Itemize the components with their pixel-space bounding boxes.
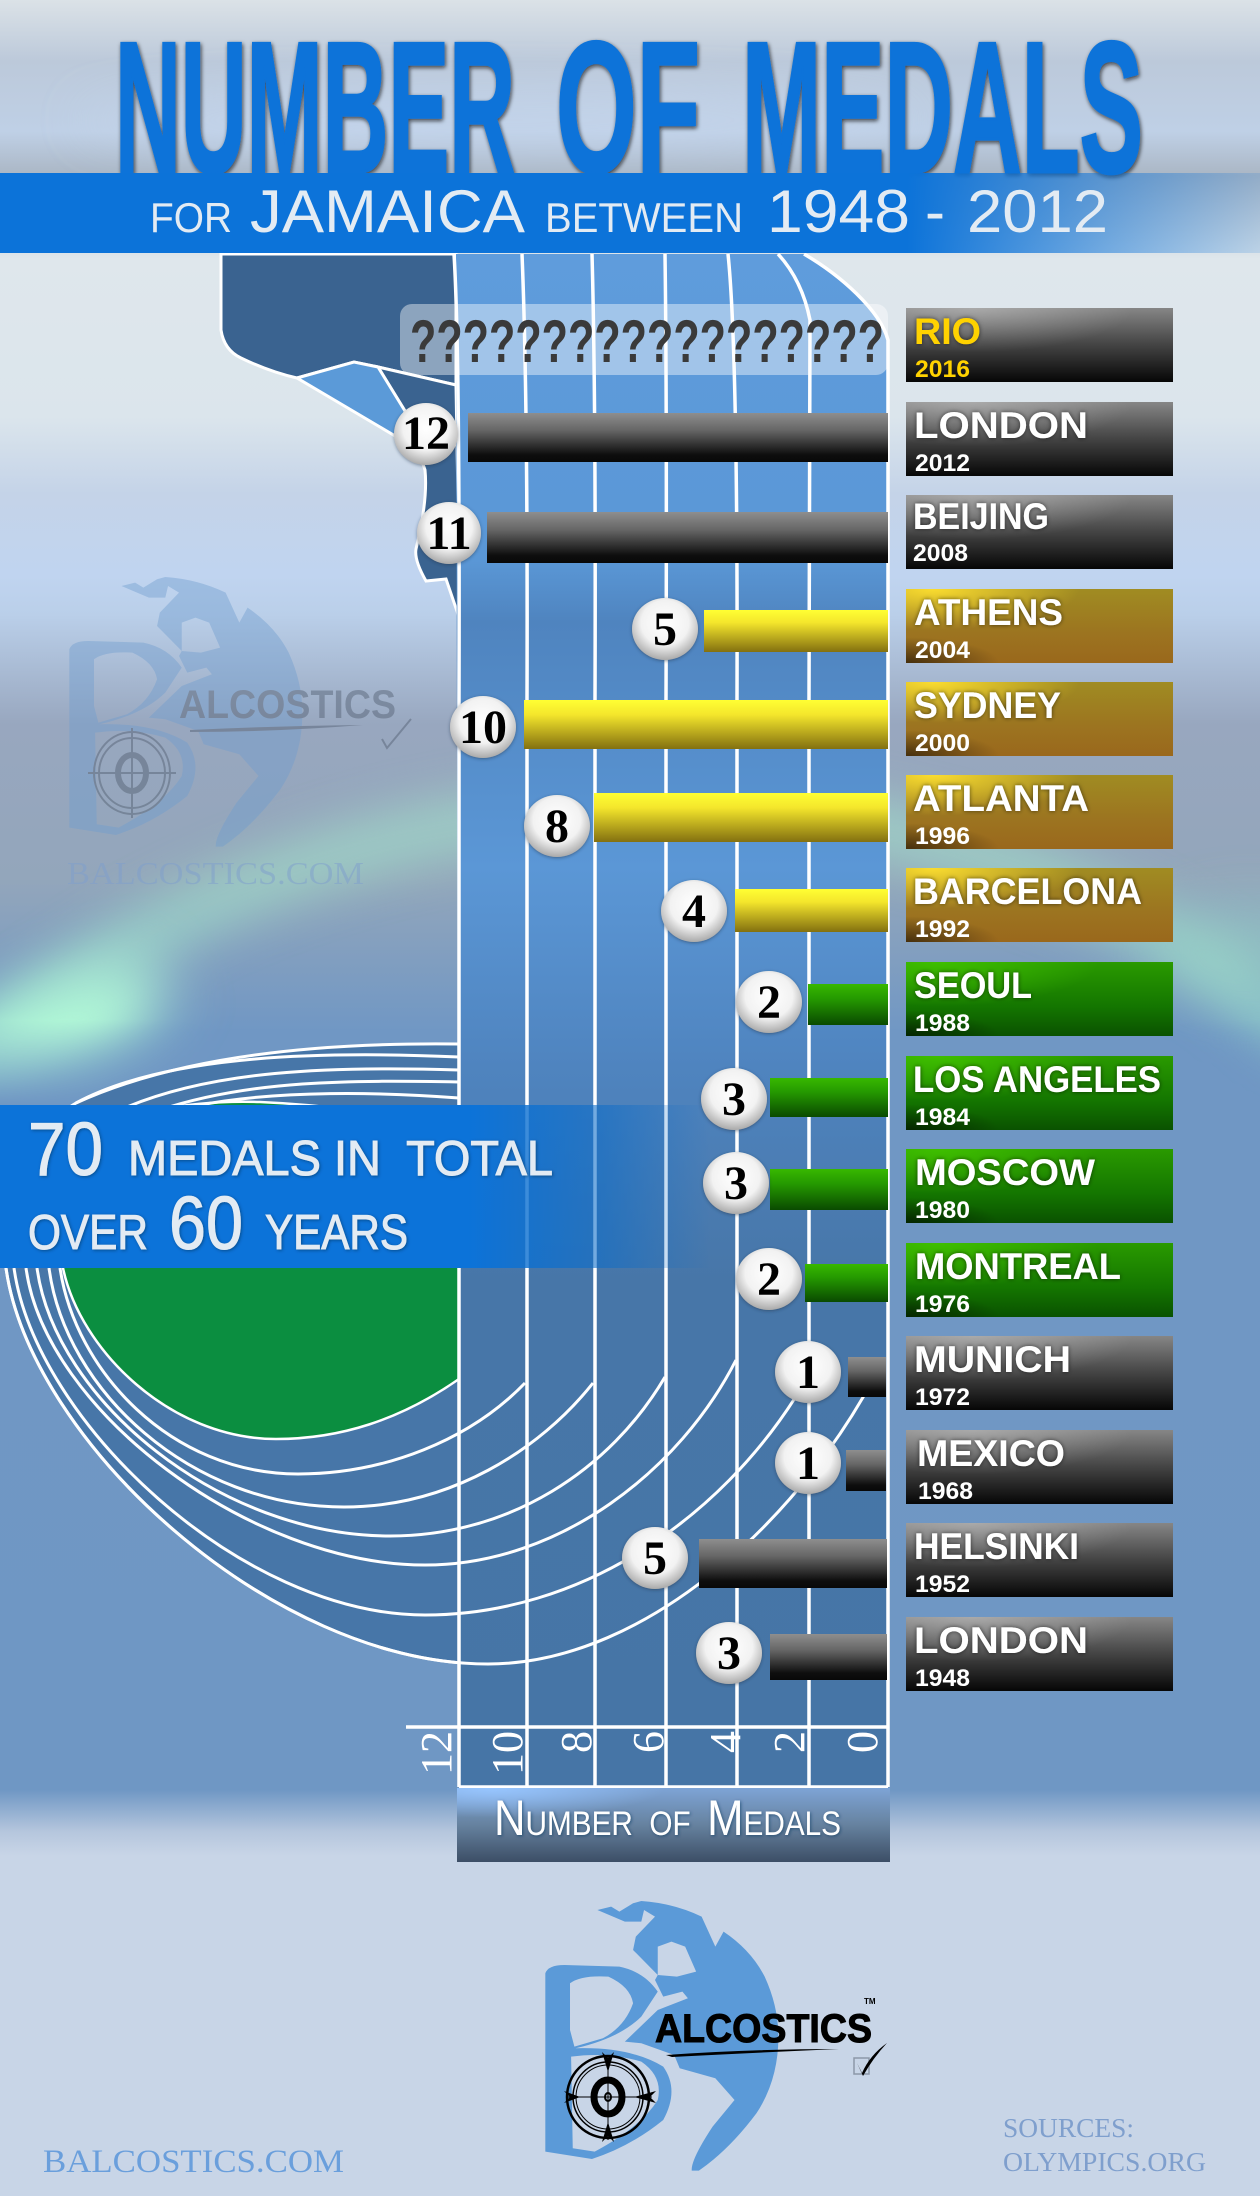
watermark logo: ALCOSTICS [179,683,396,727]
subtitle banner [0,173,1260,253]
bar: montreal 1976 [805,1264,888,1302]
y axis tick labels: 2 [765,1731,814,1753]
bar: barcelona 1992 [735,889,888,932]
ball 3 london [696,1622,762,1684]
bars [468,413,888,1680]
rio question marks: ?????????????????? [410,308,884,375]
bar: london 1948 [770,1634,887,1680]
total callout banner: MEDALS IN TOTAL [128,1132,553,1186]
subtitle banner: 2012 [967,178,1108,245]
ball 11 [417,502,481,564]
bar: seoul 1988 [808,984,888,1025]
swoosh [666,2049,839,2057]
ball 1 mexico [775,1432,841,1494]
label: rio 2016: 2016 [915,356,970,383]
bar: london 2012 [468,413,888,462]
sources [1003,2113,1206,2177]
ball 8 [524,795,590,857]
label: mexico 1968 [906,1430,1173,1505]
y axis tick labels: 10 [483,1731,532,1775]
label: helsinki 1952 [906,1523,1173,1598]
subtitle banner: - [925,178,945,245]
bar: beijing 2008 [487,512,888,563]
label: athens 2004: ATHENS [914,592,1063,633]
label: sydney 2000: 2000 [915,730,970,757]
y axis tick labels: 4 [701,1731,750,1753]
total callout banner: YEARS [265,1206,408,1260]
label: rio 2016: RIO [914,311,981,352]
subtitle banner: FOR [150,194,232,241]
label: beijing 2008 [906,495,1173,569]
bar: sydney 2000 [524,700,888,749]
label: helsinki 1952: 1952 [915,1571,970,1598]
label: helsinki 1952: HELSINKI [914,1526,1079,1567]
title: NUMBER [115,3,515,212]
y axis tick labels [412,1731,887,1775]
bar: los angeles 1984 [770,1078,888,1117]
label: mexico 1968: MEXICO [917,1433,1065,1474]
value balls [394,403,841,1684]
games labels [906,308,1173,1692]
total callout banner: OVER [28,1206,148,1260]
label: london 2012: LONDON [914,405,1088,446]
label: seoul 1988 [906,962,1173,1037]
ball 1 munich [775,1341,841,1403]
label: atlanta 1996: ATLANTA [913,778,1089,819]
ball 3 los angeles [701,1068,767,1130]
ball 2 seoul: 2 [757,976,781,1029]
bar: munich 1972 [848,1357,886,1397]
stadium track [5,254,888,1787]
website: BALCOSTICS.COM [43,2144,344,2180]
label: barcelona 1992: BARCELONA [913,871,1142,912]
label: seoul 1988: SEOUL [914,965,1032,1006]
label: barcelona 1992 [906,868,1173,943]
bar: mexico 1968 [846,1450,886,1491]
trademark: TM [864,1997,876,2006]
y axis tick labels: 8 [552,1731,601,1753]
brand name: ALCOSTICS [655,2007,872,2051]
title: OF [556,3,700,212]
ball 5 athens: 5 [653,603,677,656]
label: london 2012: 2012 [915,450,970,477]
label: london 2012 [906,402,1173,477]
dark infield top [221,254,456,385]
rio question marks [400,304,888,375]
ball 8: 8 [545,800,569,853]
ball 1 mexico: 1 [796,1437,820,1490]
infield grass [63,1102,459,1439]
oval lower track [5,1044,888,1664]
label: london 1948: LONDON [914,1620,1088,1661]
label: munich 1972: 1972 [915,1384,970,1411]
balcostics logo [545,1901,887,2171]
sources: OLYMPICS.ORG [1003,2147,1206,2177]
label: munich 1972: MUNICH [914,1339,1071,1380]
bar: helsinki 1952 [699,1539,887,1588]
ball 12 [394,403,458,465]
label: sydney 2000 [906,682,1173,757]
label: montreal 1976 [906,1243,1173,1318]
bar: moscow 1980 [770,1169,888,1210]
label: montreal 1976: 1976 [915,1291,970,1318]
label: athens 2004: 2004 [915,637,971,664]
total callout banner: 60 [169,1181,243,1265]
ball 12: 12 [402,407,450,460]
label: sydney 2000: SYDNEY [914,685,1061,726]
label: beijing 2008: BEIJING [913,496,1049,537]
subtitle banner: 1948 [767,178,910,245]
y axis tick labels: 6 [624,1731,673,1753]
label: barcelona 1992: 1992 [915,916,970,943]
main straight [456,254,888,1787]
ball 2 montreal [736,1248,802,1310]
label: atlanta 1996: 1996 [915,823,970,850]
sources: SOURCES: [1003,2113,1134,2143]
total callout banner: 70 [28,1107,103,1191]
label: athens 2004 [906,589,1173,664]
bar: atlanta 1996 [594,793,888,842]
label: montreal 1976: MONTREAL [915,1246,1121,1287]
label: mexico 1968: 1968 [918,1478,973,1505]
icon: check box [854,2043,887,2076]
ball 2 montreal: 2 [757,1253,781,1306]
label: moscow 1980: 1980 [915,1197,970,1224]
icon: target [564,2052,656,2142]
total callout banner [0,1105,710,1268]
label: london 1948: 1948 [915,1665,970,1692]
axis title box [457,1788,890,1862]
label: los angeles 1984: LOS ANGELES [913,1059,1161,1100]
ball 2 seoul [736,971,802,1033]
label: moscow 1980: MOSCOW [915,1152,1095,1193]
subtitle banner: BETWEEN [545,194,743,241]
label: moscow 1980 [906,1149,1173,1224]
ball 3 moscow: 3 [724,1157,748,1210]
ball 3 los angeles: 3 [722,1073,746,1126]
label: los angeles 1984: 1984 [915,1104,971,1131]
label: beijing 2008: 2008 [913,540,968,567]
ball 1 munich: 1 [796,1346,820,1399]
label: los angeles 1984 [906,1056,1173,1131]
y axis tick labels: 12 [412,1731,461,1775]
icon: globe and letter B [545,1901,778,2171]
bar: athens 2004 [704,610,888,652]
label: seoul 1988: 1988 [915,1010,970,1037]
watermark logo [69,577,411,847]
y axis tick labels: 0 [838,1731,887,1753]
ball 5 athens [632,598,698,660]
label: munich 1972 [906,1336,1173,1411]
ball 5 helsinki: 5 [643,1532,667,1585]
ball 5 helsinki [622,1527,688,1589]
ball 11: 11 [426,507,472,560]
ball 4 [661,880,727,942]
axis title box: NUMBER OF MEDALS [494,1790,841,1846]
ball 3 london: 3 [717,1627,741,1680]
watermark url: BALCOSTICS.COM [67,855,364,891]
label: rio 2016 [906,308,1173,383]
ball 10 [450,696,516,758]
ball 4: 4 [682,885,706,938]
label: london 1948 [906,1617,1173,1692]
subtitle banner: JAMAICA [250,178,525,245]
label: atlanta 1996 [906,775,1173,850]
ball 10: 10 [459,701,507,754]
ball 3 moscow [703,1152,769,1214]
